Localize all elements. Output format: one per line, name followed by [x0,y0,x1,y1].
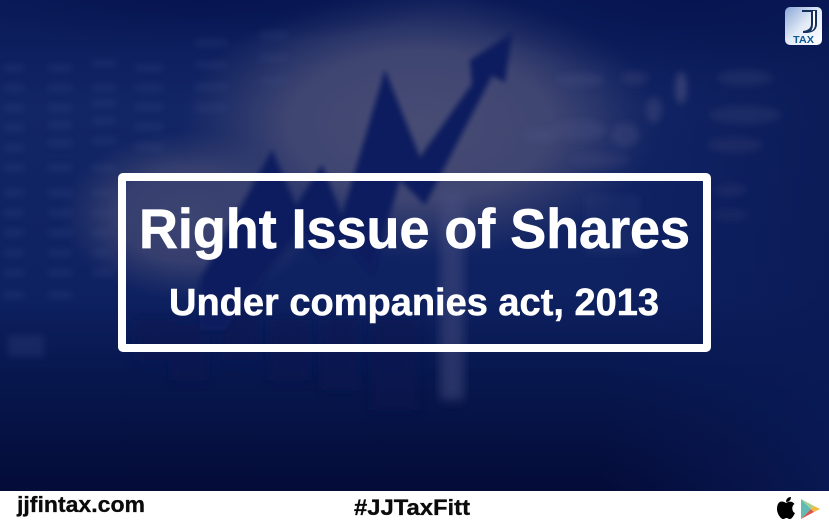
ticker columns [4,32,288,357]
subtitle: Under companies act, 2013 [169,282,659,324]
title box [122,177,707,348]
soft light column right of the box [440,190,464,400]
blurred rising arrow [200,33,512,330]
hashtag: #JJTaxFitt [354,495,471,520]
website: jjfintax.com [16,492,145,517]
logo: JJ Tax: TAX [793,35,814,46]
title: Right Issue of Shares [139,197,690,260]
footer bar [0,491,829,526]
logo: JJ Tax [785,7,822,46]
box frame [122,177,707,348]
chart bars [135,300,417,410]
icon: play store [801,499,820,519]
soft light blobs on the right [522,70,781,255]
icon: apple [777,497,795,519]
